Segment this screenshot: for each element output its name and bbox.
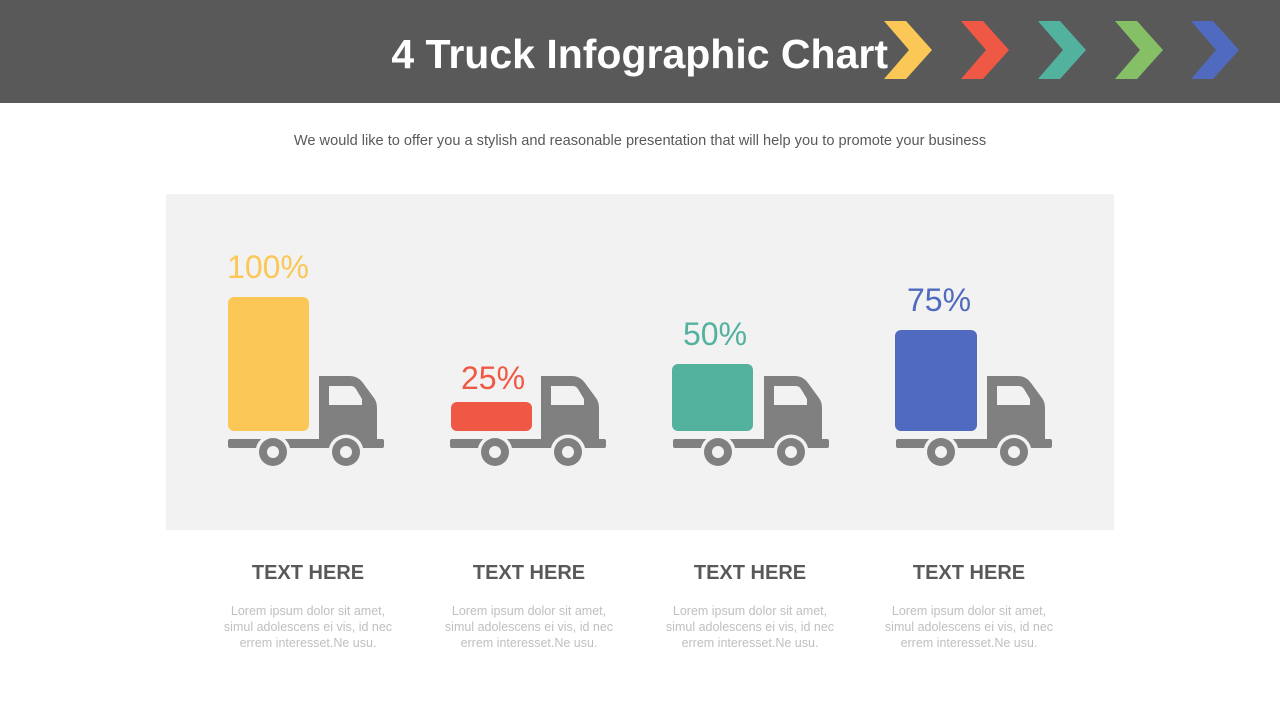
text block 4: errem interesset.Ne usu. [901,636,1037,650]
text block 2: Lorem ipsum dolor sit amet, [452,604,606,618]
text block 1: Lorem ipsum dolor sit amet, [231,604,385,618]
text block 1: errem interesset.Ne usu. [240,636,376,650]
truck 1: 100%: 100% [227,249,309,285]
text block 1: simul adolescens ei vis, id nec [224,620,392,634]
truck 3: 50%: 50% [683,316,747,352]
header bar [0,0,1280,103]
panel: truck chart [166,194,1114,530]
truck 3: 50% [672,316,829,470]
text block 4 [885,562,1053,650]
text block 4: TEXT HERE [913,562,1025,584]
text block 1 [224,562,392,650]
text block 2: TEXT HERE [473,562,585,584]
text block 2 [445,562,613,650]
text block 3: TEXT HERE [694,562,806,584]
text block 3: simul adolescens ei vis, id nec [666,620,834,634]
truck 2: 25%: 25% [461,360,525,396]
subtitle: We would like to offer you a stylish and reasonable presentation that will help you to promote your business [294,133,986,149]
truck 2: 25% [450,360,606,470]
truck 4: 75% [895,282,1052,470]
chevron arrows [884,21,1239,79]
text block 3 [666,562,834,650]
text block 1: TEXT HERE [252,562,364,584]
text block 2: simul adolescens ei vis, id nec [445,620,613,634]
text block 4: simul adolescens ei vis, id nec [885,620,1053,634]
title: 4 Truck Infographic Chart [391,31,888,77]
truck 1: 100% [227,249,384,470]
text block 3: errem interesset.Ne usu. [682,636,818,650]
text block 2: errem interesset.Ne usu. [461,636,597,650]
text block 3: Lorem ipsum dolor sit amet, [673,604,827,618]
truck 4: 75%: 75% [907,282,971,318]
text block 4: Lorem ipsum dolor sit amet, [892,604,1046,618]
